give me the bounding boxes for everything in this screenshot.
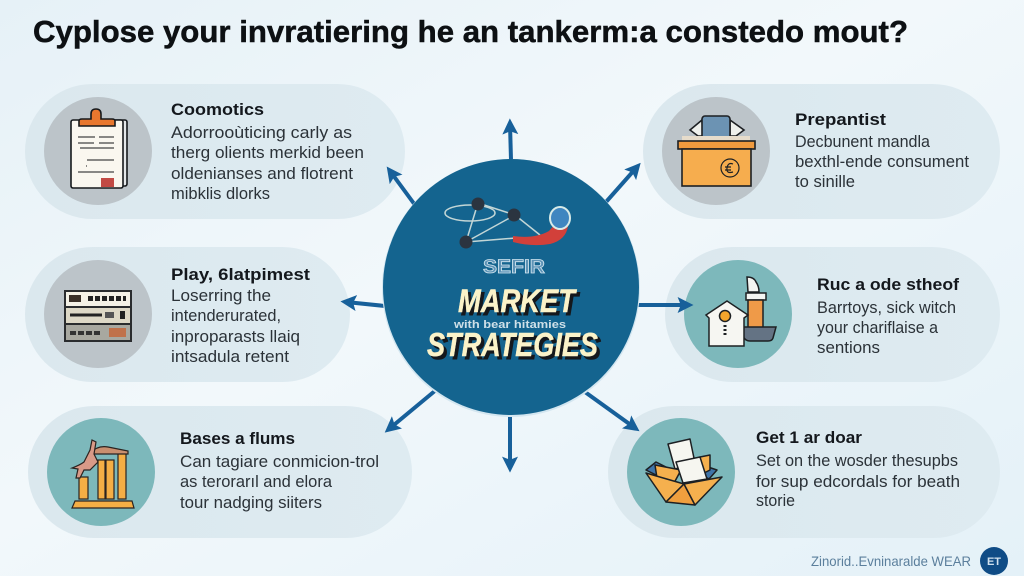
panel: Bases a flums: Can tagiare conmicion-trol <box>180 452 379 471</box>
icon: column chart with figure <box>72 440 134 508</box>
panel: Bases a flums <box>28 406 412 538</box>
hub heading: MARKET: MARKET <box>458 283 577 319</box>
icon: folded paper envelope <box>646 439 722 505</box>
panel: Coomotics: oldenianses and flotrent <box>171 164 353 183</box>
panel: Get 1 ar doar: Set on the wosder thesupbs <box>756 451 958 470</box>
footer brand <box>811 547 1008 575</box>
hub subheading: with bear hitamies <box>453 319 566 331</box>
panel: Ruc a ode stheof: Barrtoys, sick witch <box>817 298 956 317</box>
panel: Ruc a ode stheof: Ruc a ode stheof <box>817 275 959 294</box>
panel: Play, 6latpimest: Loserring the <box>171 286 271 305</box>
panel: Play, 6latpimest: inproparasts llaiq <box>171 327 300 346</box>
panel: Ruc a ode stheof <box>665 247 1000 382</box>
icon: house and tower <box>706 277 776 346</box>
panel: Coomotics: Adorrooùticing carly as <box>171 123 352 142</box>
icon: server rack <box>64 290 132 342</box>
footer brand: ET <box>987 556 1001 568</box>
panel: Coomotics <box>25 84 405 219</box>
panel: Prepantist: Decbunent mandla <box>795 132 931 151</box>
panel: Get 1 ar doar: storie <box>756 491 795 510</box>
arrows from central hub <box>346 124 688 467</box>
panel: Prepantist: to sinille <box>795 172 855 191</box>
panel: Get 1 ar doar: Get 1 ar doar <box>756 428 862 447</box>
panel: Coomotics: mibklis dlorks <box>171 184 270 203</box>
panel: Bases a flums: Bases a flums <box>180 429 295 448</box>
panel: Prepantist: Prepantist <box>795 110 886 129</box>
panel: Coomotics: Coomotics <box>171 100 264 119</box>
panel: Bases a flums: as terorarıl and elora <box>180 472 333 491</box>
icon: network with red arm and globe <box>445 198 570 248</box>
panel: Coomotics: therg olients merkid been <box>171 143 364 162</box>
panel: Get 1 ar doar: for sup edcordals for beath <box>756 472 960 491</box>
hub heading: STRATEGIES: STRATEGIES <box>427 326 598 363</box>
title: Cyplose your invratiering he an tankerm:a constedo mout? <box>33 14 908 49</box>
panel: Play, 6latpimest: intsadula retent <box>171 347 289 366</box>
panel: Bases a flums: tour nadging siiters <box>180 493 322 512</box>
hub heading: STRATEGIES: STRATEGIES <box>430 329 601 366</box>
panel: Play, 6latpimest: Play, 6latpimest <box>171 265 310 284</box>
panel: Ruc a ode stheof: sentions <box>817 338 880 357</box>
hub caption: SEFIR: SEFIR <box>483 257 545 278</box>
hub heading: MARKET: MARKET <box>461 286 580 322</box>
panel: Ruc a ode stheof: your chariflaise a <box>817 318 939 337</box>
panel: Play, 6latpimest: intenderurated, <box>171 306 281 325</box>
central hub: market strategies <box>382 159 640 417</box>
icon: clipboard document <box>71 109 127 188</box>
panel: Play, 6latpimest <box>25 247 350 382</box>
panel: Prepantist: bexthl-ende consument <box>795 152 969 171</box>
panel: Get 1 ar doar <box>608 406 1000 538</box>
panel: Prepantist <box>643 84 1000 219</box>
footer brand: Zinorid..Evninaralde WEAR <box>811 553 971 569</box>
icon: orange box with coin <box>678 116 755 186</box>
